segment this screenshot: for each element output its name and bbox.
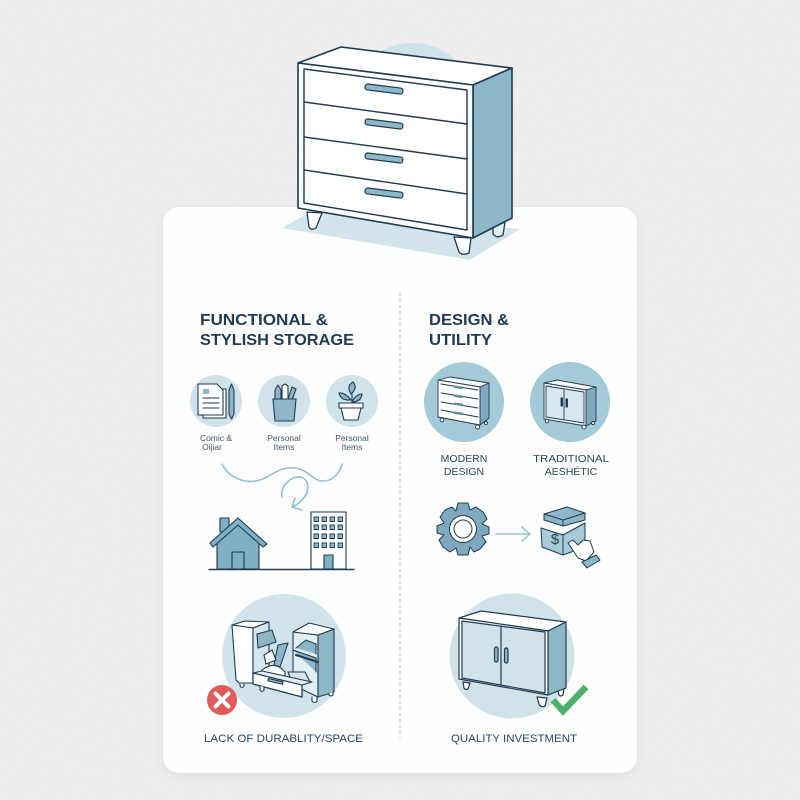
icon: pencil cup [258, 375, 310, 427]
panel: lack of durability illustration [222, 594, 346, 718]
heading: functional and stylish storage: FUNCTIONAL & [200, 312, 328, 329]
divider [399, 293, 401, 738]
icon: documents and pen [190, 375, 242, 427]
icon: potted plant [326, 375, 378, 427]
label: personal items: Personal [335, 433, 369, 443]
label: comic and other: Oijiar [202, 442, 222, 452]
heading: functional and stylish storage: STYLISH STORAGE [200, 332, 354, 349]
label: quality investment: QUALITY INVESTMENT [451, 733, 577, 745]
heading: design and utility: UTILITY [429, 332, 492, 349]
arrow: gear to investment [496, 527, 530, 541]
arrow: flowing curve to buildings [222, 464, 342, 510]
icon: traditional cabinet [530, 362, 610, 442]
panel: quality investment cabinet [450, 594, 574, 718]
label: personal items: Personal [267, 433, 301, 443]
icon: modern design dresser [424, 362, 504, 442]
background circle behind dresser [347, 43, 477, 173]
icon: gear [437, 503, 489, 555]
label: modern design: DESIGN [444, 466, 484, 478]
label: lack of durability: LACK OF DURABLITY/SPACE [204, 733, 363, 745]
icon: money box and hand: $ [551, 531, 560, 548]
label: modern design: MODERN [441, 453, 487, 465]
dresser illustration [282, 47, 520, 260]
icon: money box and hand [541, 507, 600, 568]
icon: green check [553, 687, 586, 711]
main card panel [163, 207, 637, 773]
label: traditional aesthetic: TRADITIONAL [533, 453, 609, 465]
label: comic and other: Comic & [200, 433, 232, 443]
label: traditional aesthetic: AESHÉTIC [545, 465, 598, 478]
icon: house and office building [209, 512, 354, 570]
icon: red cross badge [207, 685, 237, 715]
label: personal items: Items [342, 442, 362, 452]
label: personal items: Items [274, 442, 294, 452]
heading: design and utility: DESIGN & [429, 312, 509, 329]
